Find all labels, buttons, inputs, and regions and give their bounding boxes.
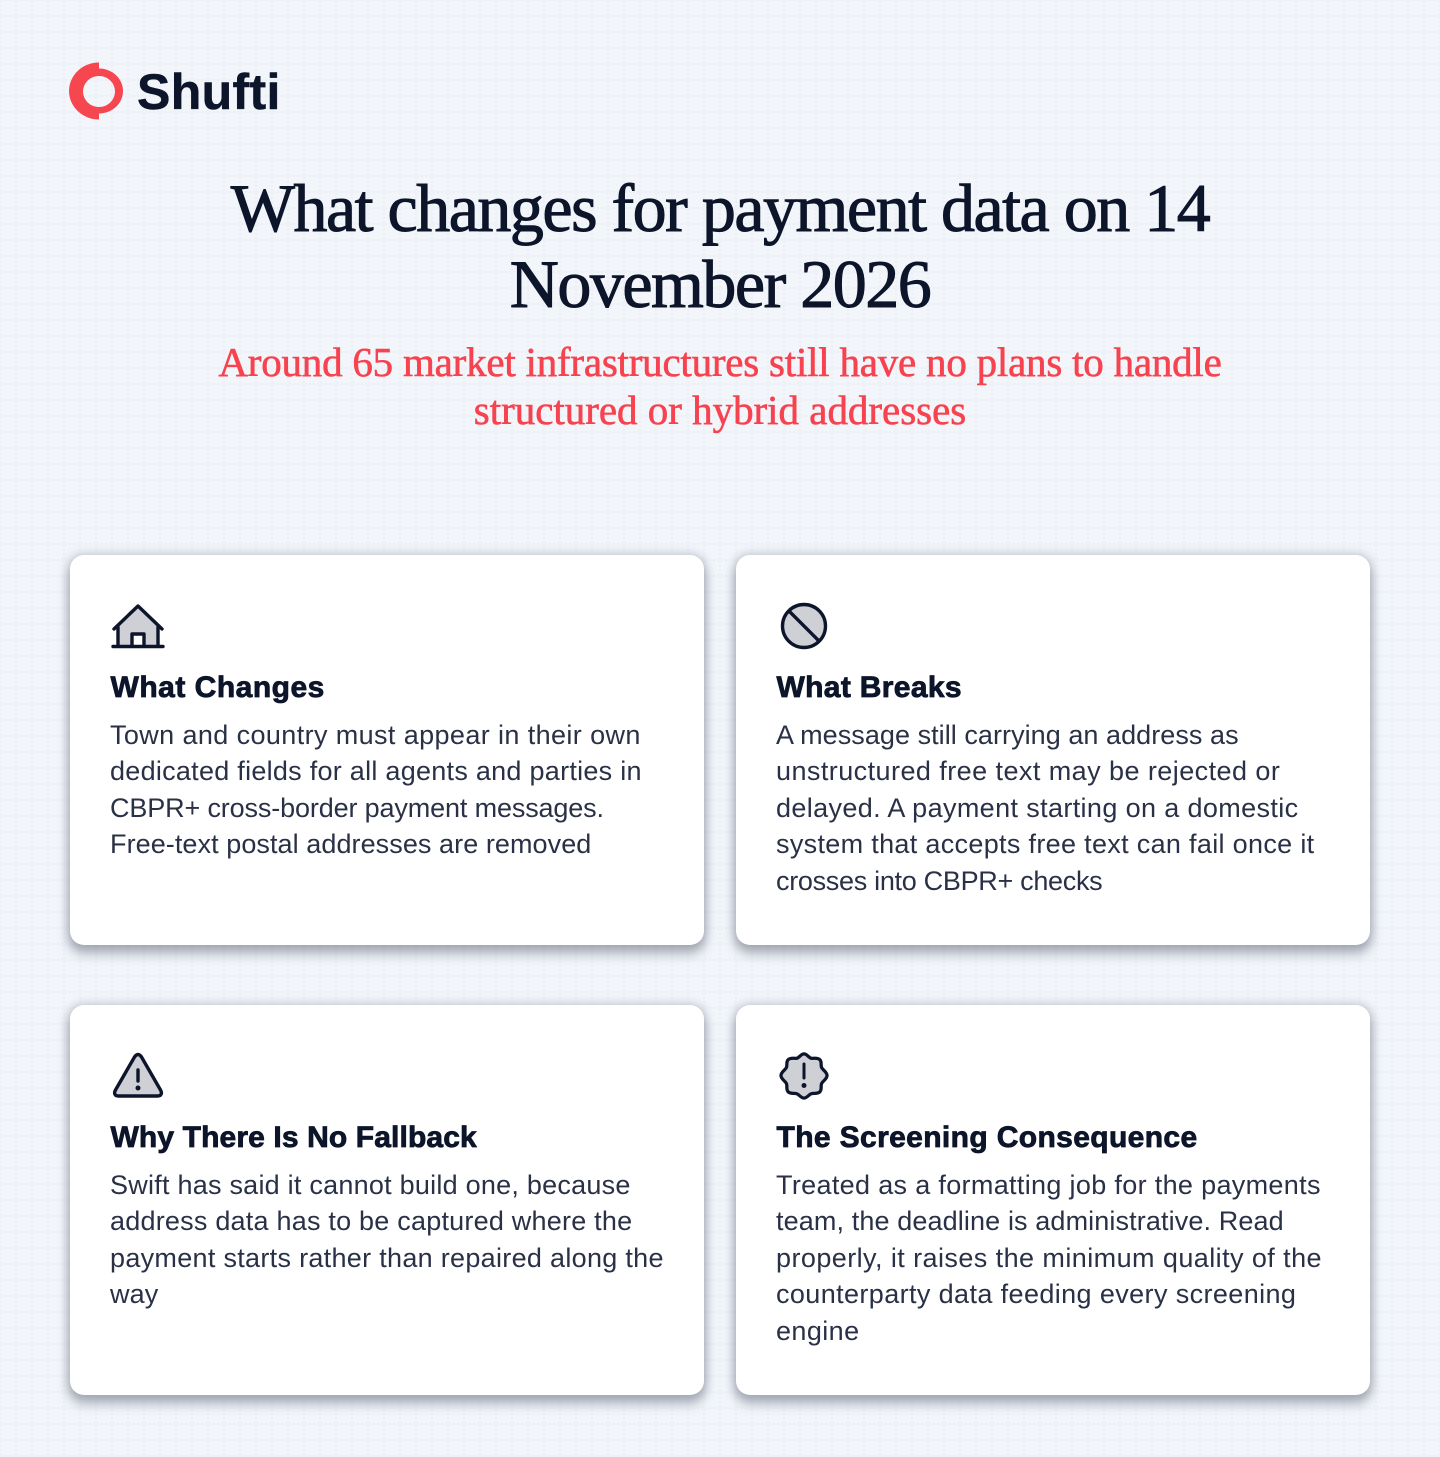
text block: A message still carrying an address as xyxy=(776,720,1239,750)
text block: Treated as a formatting job for the payments xyxy=(776,1170,1321,1200)
text block: payment starts rather than repaired along the xyxy=(110,1243,664,1273)
icon: house xyxy=(111,604,165,648)
text block: unstructured free text may be rejected or xyxy=(776,756,1280,786)
panel: What Changes xyxy=(70,555,704,945)
panel: The Screening Consequence xyxy=(736,1005,1370,1395)
icon: warning triangle xyxy=(112,1052,164,1098)
text block: delayed. A payment starting on a domestic xyxy=(776,793,1298,823)
panel: What Breaks xyxy=(736,555,1370,945)
icon: logo ring xyxy=(69,62,123,120)
subtitle: Around 65 market infrastructures still have no plans to handle xyxy=(218,339,1222,385)
text block: team, the deadline is administrative. Read xyxy=(776,1206,1284,1236)
title: What changes for payment data on 14 xyxy=(231,170,1209,246)
text block: Free-text postal addresses are removed xyxy=(110,829,591,859)
text block: dedicated fields for all agents and parties in xyxy=(110,756,642,786)
subtitle xyxy=(218,339,1222,434)
text block: Swift has said it cannot build one, because xyxy=(110,1170,631,1200)
heading: What Changes xyxy=(110,671,325,704)
text block xyxy=(110,720,642,859)
panel: Why There Is No Fallback xyxy=(70,1005,704,1395)
icon: seal alert xyxy=(779,1052,829,1100)
title xyxy=(230,170,1210,322)
logo wordmark: Shufti xyxy=(137,64,281,120)
text block: way xyxy=(110,1279,158,1309)
heading: The Screening Consequence xyxy=(776,1121,1198,1154)
heading: What Breaks xyxy=(776,671,962,704)
title: November 2026 xyxy=(510,246,930,322)
text block xyxy=(110,1170,664,1309)
heading: Why There Is No Fallback xyxy=(110,1121,477,1154)
text block: properly, it raises the minimum quality of the xyxy=(776,1243,1322,1273)
text block: crosses into CBPR+ checks xyxy=(776,866,1102,896)
text block: engine xyxy=(776,1316,859,1346)
text block: Town and country must appear in their own xyxy=(110,720,641,750)
logo: Shufti xyxy=(69,62,281,120)
text block xyxy=(776,1170,1322,1346)
text block xyxy=(776,720,1314,896)
text block: CBPR+ cross-border payment messages. xyxy=(110,793,604,823)
text block: system that accepts free text can fail once it xyxy=(776,829,1314,859)
text block: counterparty data feeding every screening xyxy=(776,1279,1296,1309)
subtitle: structured or hybrid addresses xyxy=(474,387,966,433)
text block: address data has to be captured where the xyxy=(110,1206,632,1236)
icon: prohibited xyxy=(780,602,828,650)
